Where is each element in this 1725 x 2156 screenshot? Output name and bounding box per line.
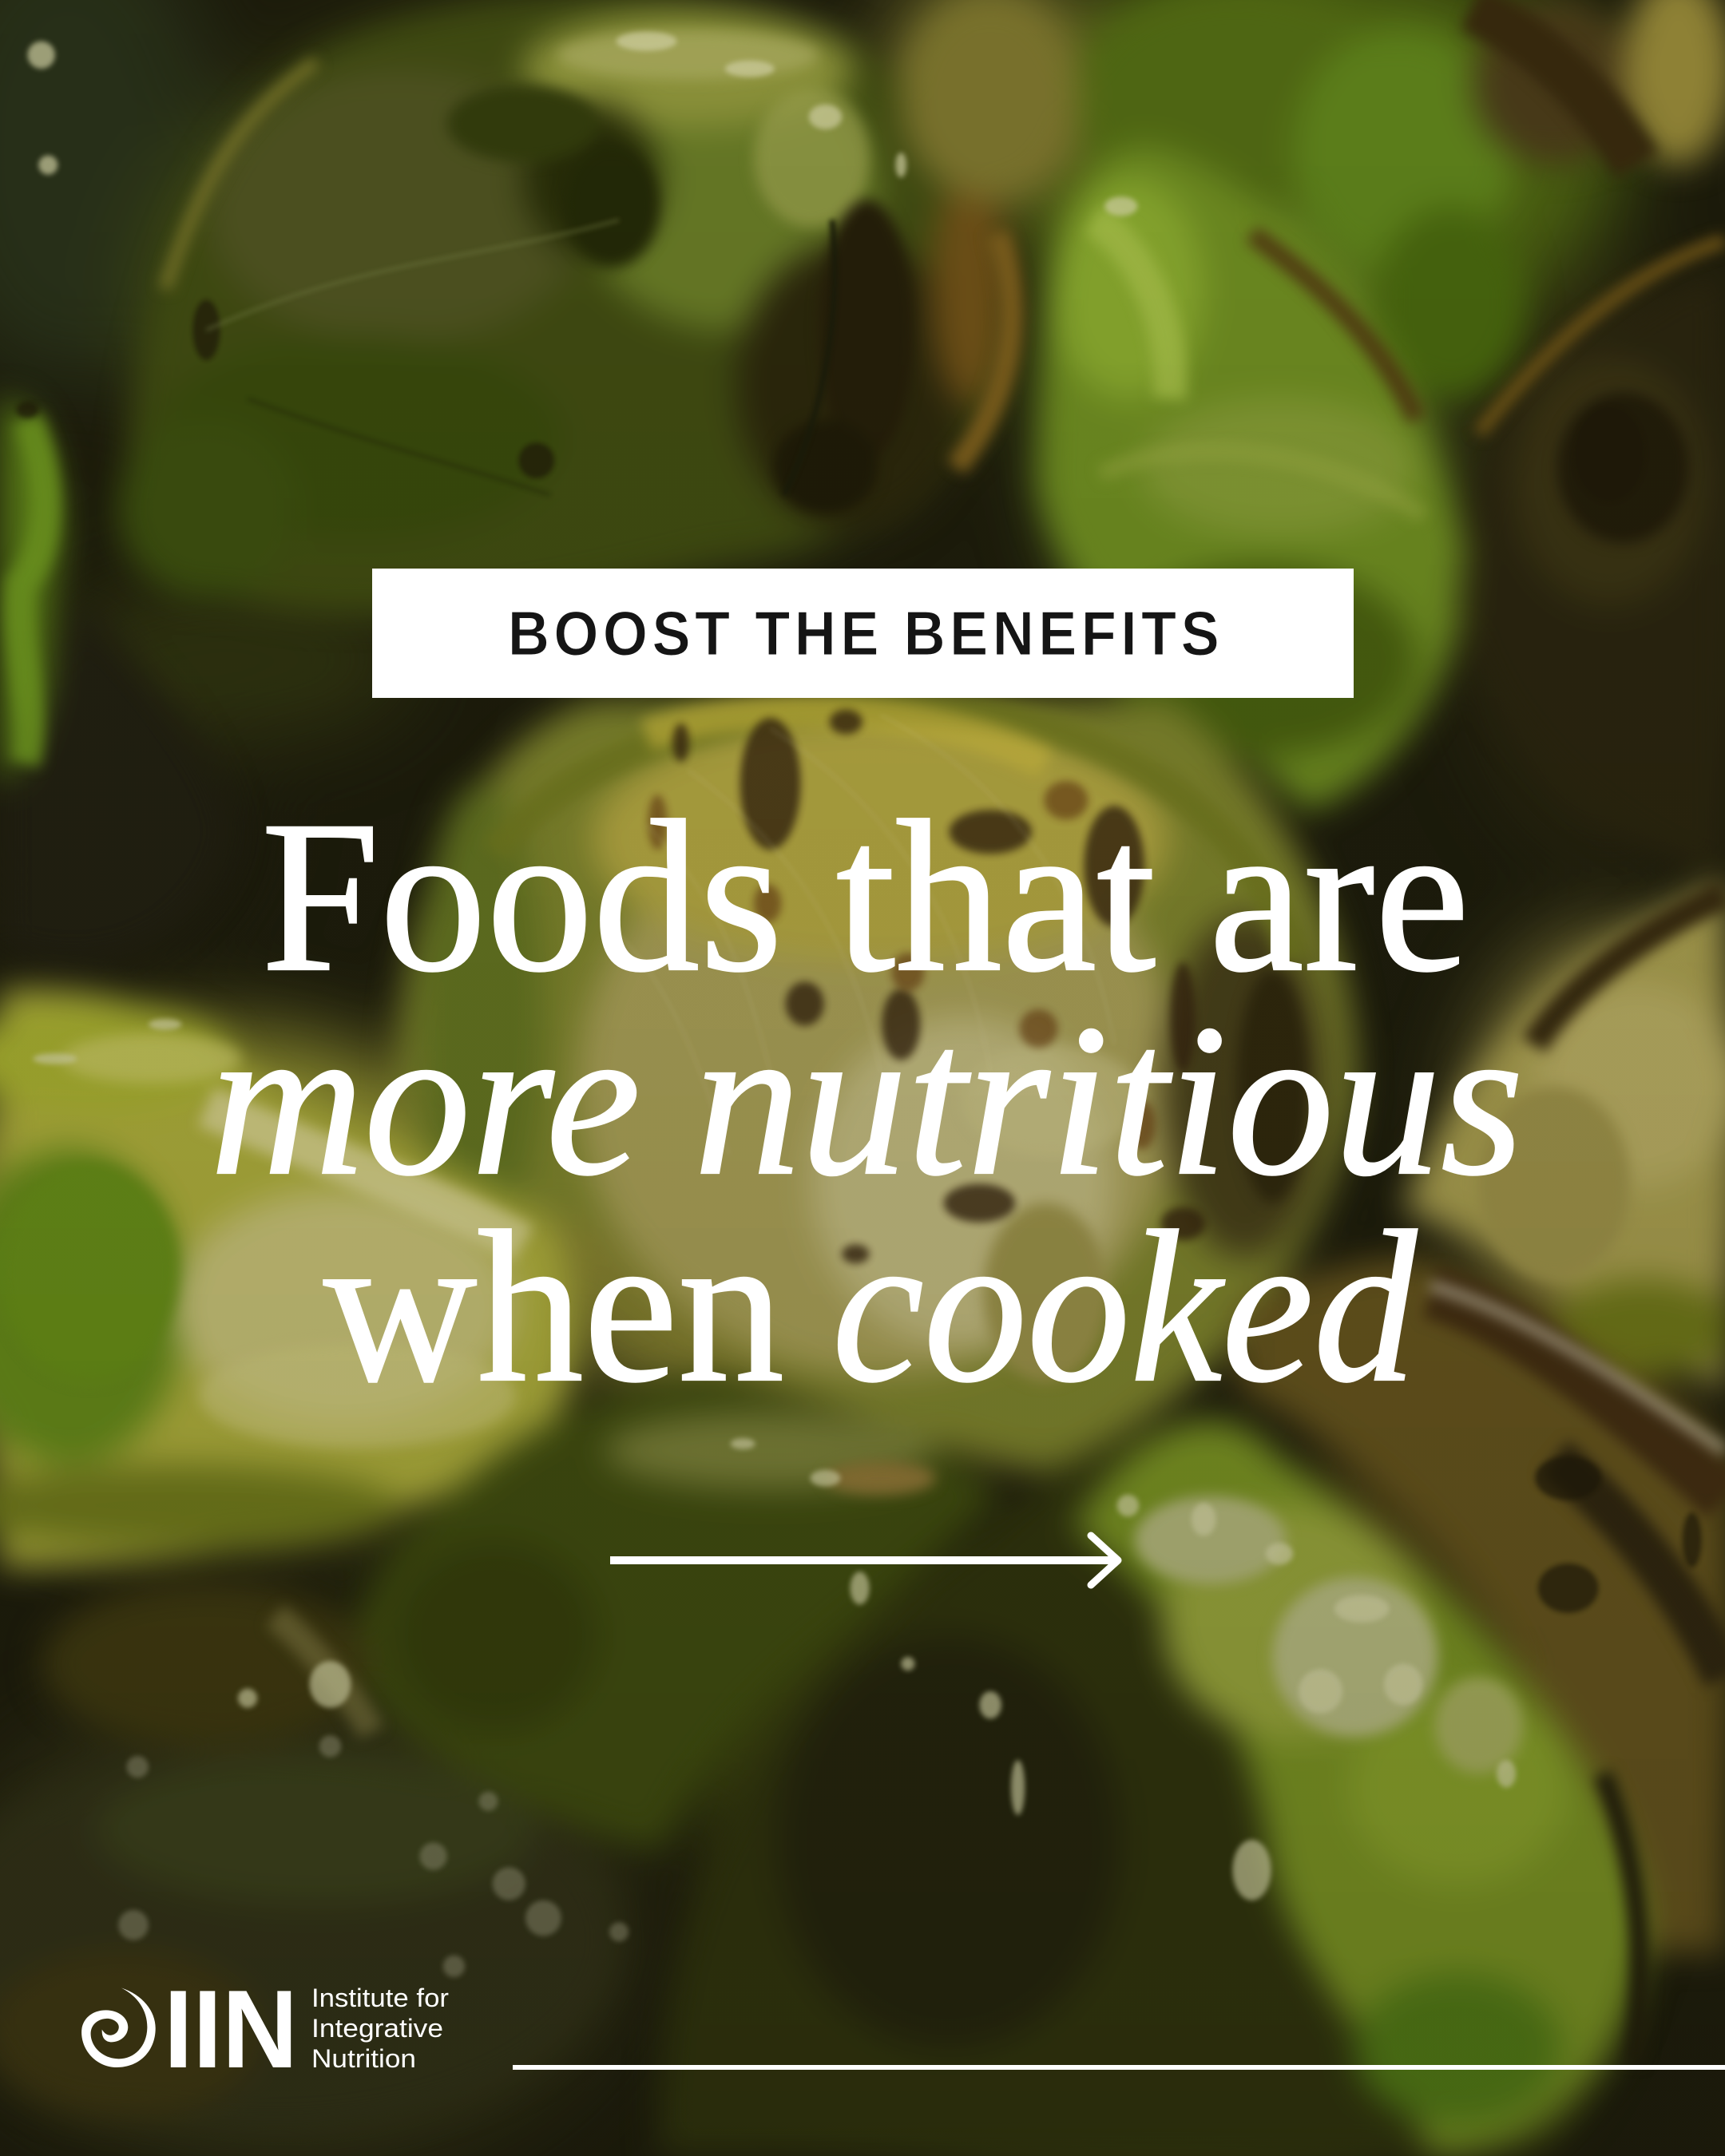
small left sprout <box>19 419 46 763</box>
center cut sprout <box>399 701 1355 1471</box>
title line 2: more nutritious <box>210 980 1524 1220</box>
logo: IIN <box>81 1968 449 2091</box>
left small <box>0 398 63 784</box>
left cut sprout <box>0 989 575 1567</box>
logo wordmark: Nutrition <box>311 2044 416 2073</box>
icon: spiral <box>81 1988 156 2067</box>
sprout 5 <box>1458 261 1725 880</box>
bottom left sprout <box>0 1746 619 2131</box>
logo letters: IIN <box>164 1968 298 2091</box>
lower right sprout <box>1238 1258 1725 1952</box>
char speckles on the cut sprout <box>672 710 1205 1263</box>
bottom sprout highlights <box>1135 1496 1287 1584</box>
title line 3 italic word: cooked <box>832 1187 1420 1427</box>
tag: boost the benefits <box>372 569 1354 698</box>
logo wordmark: Integrative <box>311 2014 443 2043</box>
fine leaf texture <box>619 715 1114 1155</box>
tag: boost the benefits: BOOST THE BENEFITS <box>508 598 1219 668</box>
highlights on top-left sprout <box>557 30 819 80</box>
title <box>210 776 1524 1427</box>
left cut highlights <box>62 1034 240 1084</box>
bottom mid sprout <box>351 1375 997 1849</box>
specular highlights <box>27 32 1516 1900</box>
sprout 3 <box>1073 0 1403 206</box>
sprout 4 <box>1038 146 1465 811</box>
sprout 4 highlights and char <box>1093 220 1170 398</box>
right cut sprout <box>1403 880 1725 1389</box>
big bottom right sprout <box>659 1424 1648 2156</box>
lower right char edge <box>1430 1293 1725 1499</box>
logo wordmark <box>311 1984 449 2073</box>
arrow <box>610 1536 1118 1585</box>
sprout 1 <box>124 0 1013 614</box>
footer rule <box>513 2065 1725 2070</box>
logo wordmark: Institute for <box>311 1984 449 2012</box>
center cut rings <box>495 708 1293 962</box>
title line 1: Foods that are <box>261 776 1469 1017</box>
right cut char edge <box>1534 894 1725 1045</box>
top right <box>1472 7 1637 165</box>
title line 3: when <box>323 1187 784 1427</box>
